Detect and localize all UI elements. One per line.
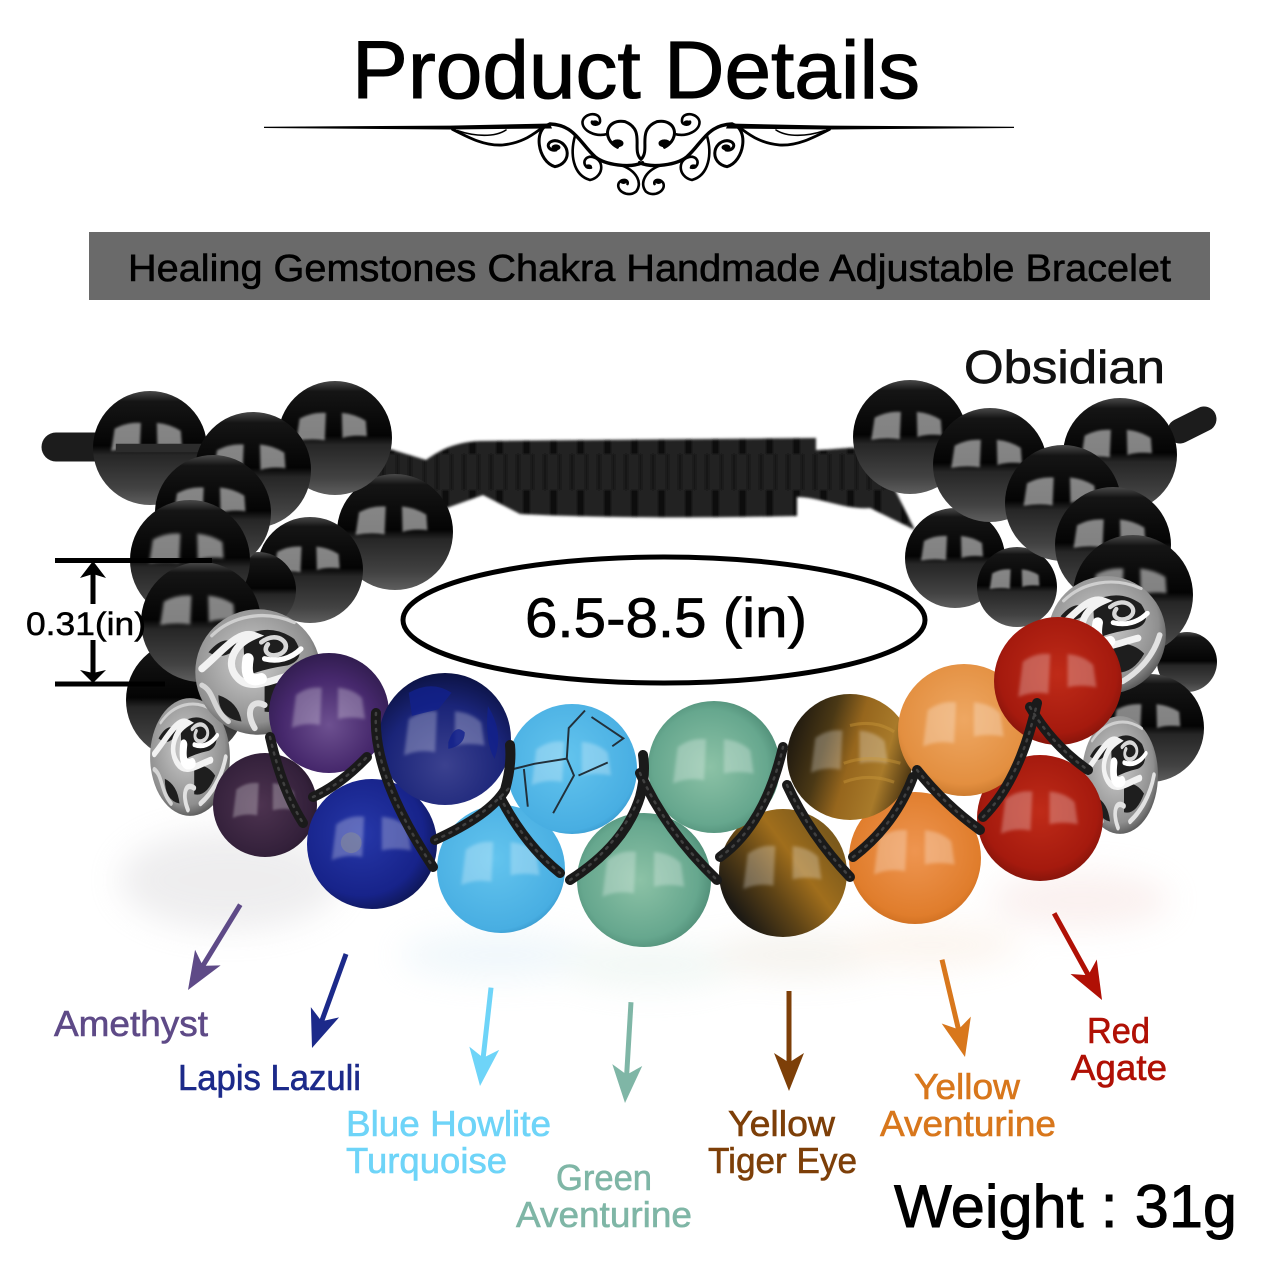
- subtitle banner: Healing Gemstones Chakra Handmade Adjustable Bracelet: [128, 248, 1171, 290]
- floor reflection: [120, 830, 1170, 989]
- label: Red Agate: Agate: [1071, 1047, 1167, 1088]
- label: Red Agate: Red: [1087, 1010, 1150, 1051]
- label: Blue Howlite Turquoise: Turquoise: [346, 1140, 507, 1181]
- circumference ellipse callout: 6.5-8.5 (in): [525, 586, 807, 649]
- label: Green Aventurine: Aventurine: [516, 1194, 692, 1235]
- obsidian beads left back: [93, 381, 453, 760]
- bracelet photo illustration: [56, 380, 1217, 989]
- label: Red Agate: [1071, 1010, 1167, 1088]
- bead size dimension: [26, 560, 212, 684]
- arrow: amethyst: [175, 897, 253, 998]
- arrow: blue howlite turquoise: [465, 986, 506, 1088]
- knotted cords: [270, 703, 1088, 880]
- weight label: Weight : 31g: [894, 1173, 1237, 1240]
- label: Blue Howlite Turquoise: [346, 1103, 551, 1181]
- label: Yellow Aventurine: Yellow: [914, 1066, 1021, 1107]
- ornamental divider: [264, 114, 1014, 194]
- obsidian beads right back: [853, 380, 1217, 782]
- upper row gemstones: [269, 617, 1122, 834]
- lower row gemstones: [213, 753, 1103, 947]
- bead size dimension: 0.31(in): [26, 606, 146, 642]
- label: Yellow Aventurine: Aventurine: [880, 1103, 1056, 1144]
- arrow: yellow tiger eye: [774, 991, 804, 1091]
- arrow: red agate: [1041, 906, 1115, 1007]
- label: Yellow Aventurine: [880, 1066, 1056, 1144]
- label: Green Aventurine: Green: [556, 1157, 652, 1198]
- arrow: lapis lazuli: [298, 949, 360, 1053]
- rope end right: [1180, 419, 1204, 431]
- circumference ellipse callout: [403, 557, 925, 683]
- title: Product Details: [352, 25, 920, 116]
- label: Obsidian: Obsidian: [964, 341, 1165, 393]
- subtitle banner: [89, 232, 1210, 300]
- label: Yellow Tiger Eye: [708, 1103, 857, 1181]
- label: Lapis Lazuli: Lapis Lazuli: [178, 1057, 361, 1098]
- arrow: yellow aventurine: [927, 956, 980, 1060]
- arrow: green aventurine: [610, 1001, 646, 1104]
- braided sliding knot: [360, 438, 915, 530]
- label: Green Aventurine: [516, 1157, 692, 1235]
- label: Blue Howlite Turquoise: Blue Howlite: [346, 1103, 551, 1144]
- label: Yellow Tiger Eye: Yellow: [728, 1103, 836, 1144]
- silver filigree beads: [150, 576, 1166, 834]
- rope end left: [56, 432, 95, 462]
- label: Amethyst: Amethyst: [54, 1003, 208, 1044]
- label: Yellow Tiger Eye: Tiger Eye: [708, 1140, 857, 1181]
